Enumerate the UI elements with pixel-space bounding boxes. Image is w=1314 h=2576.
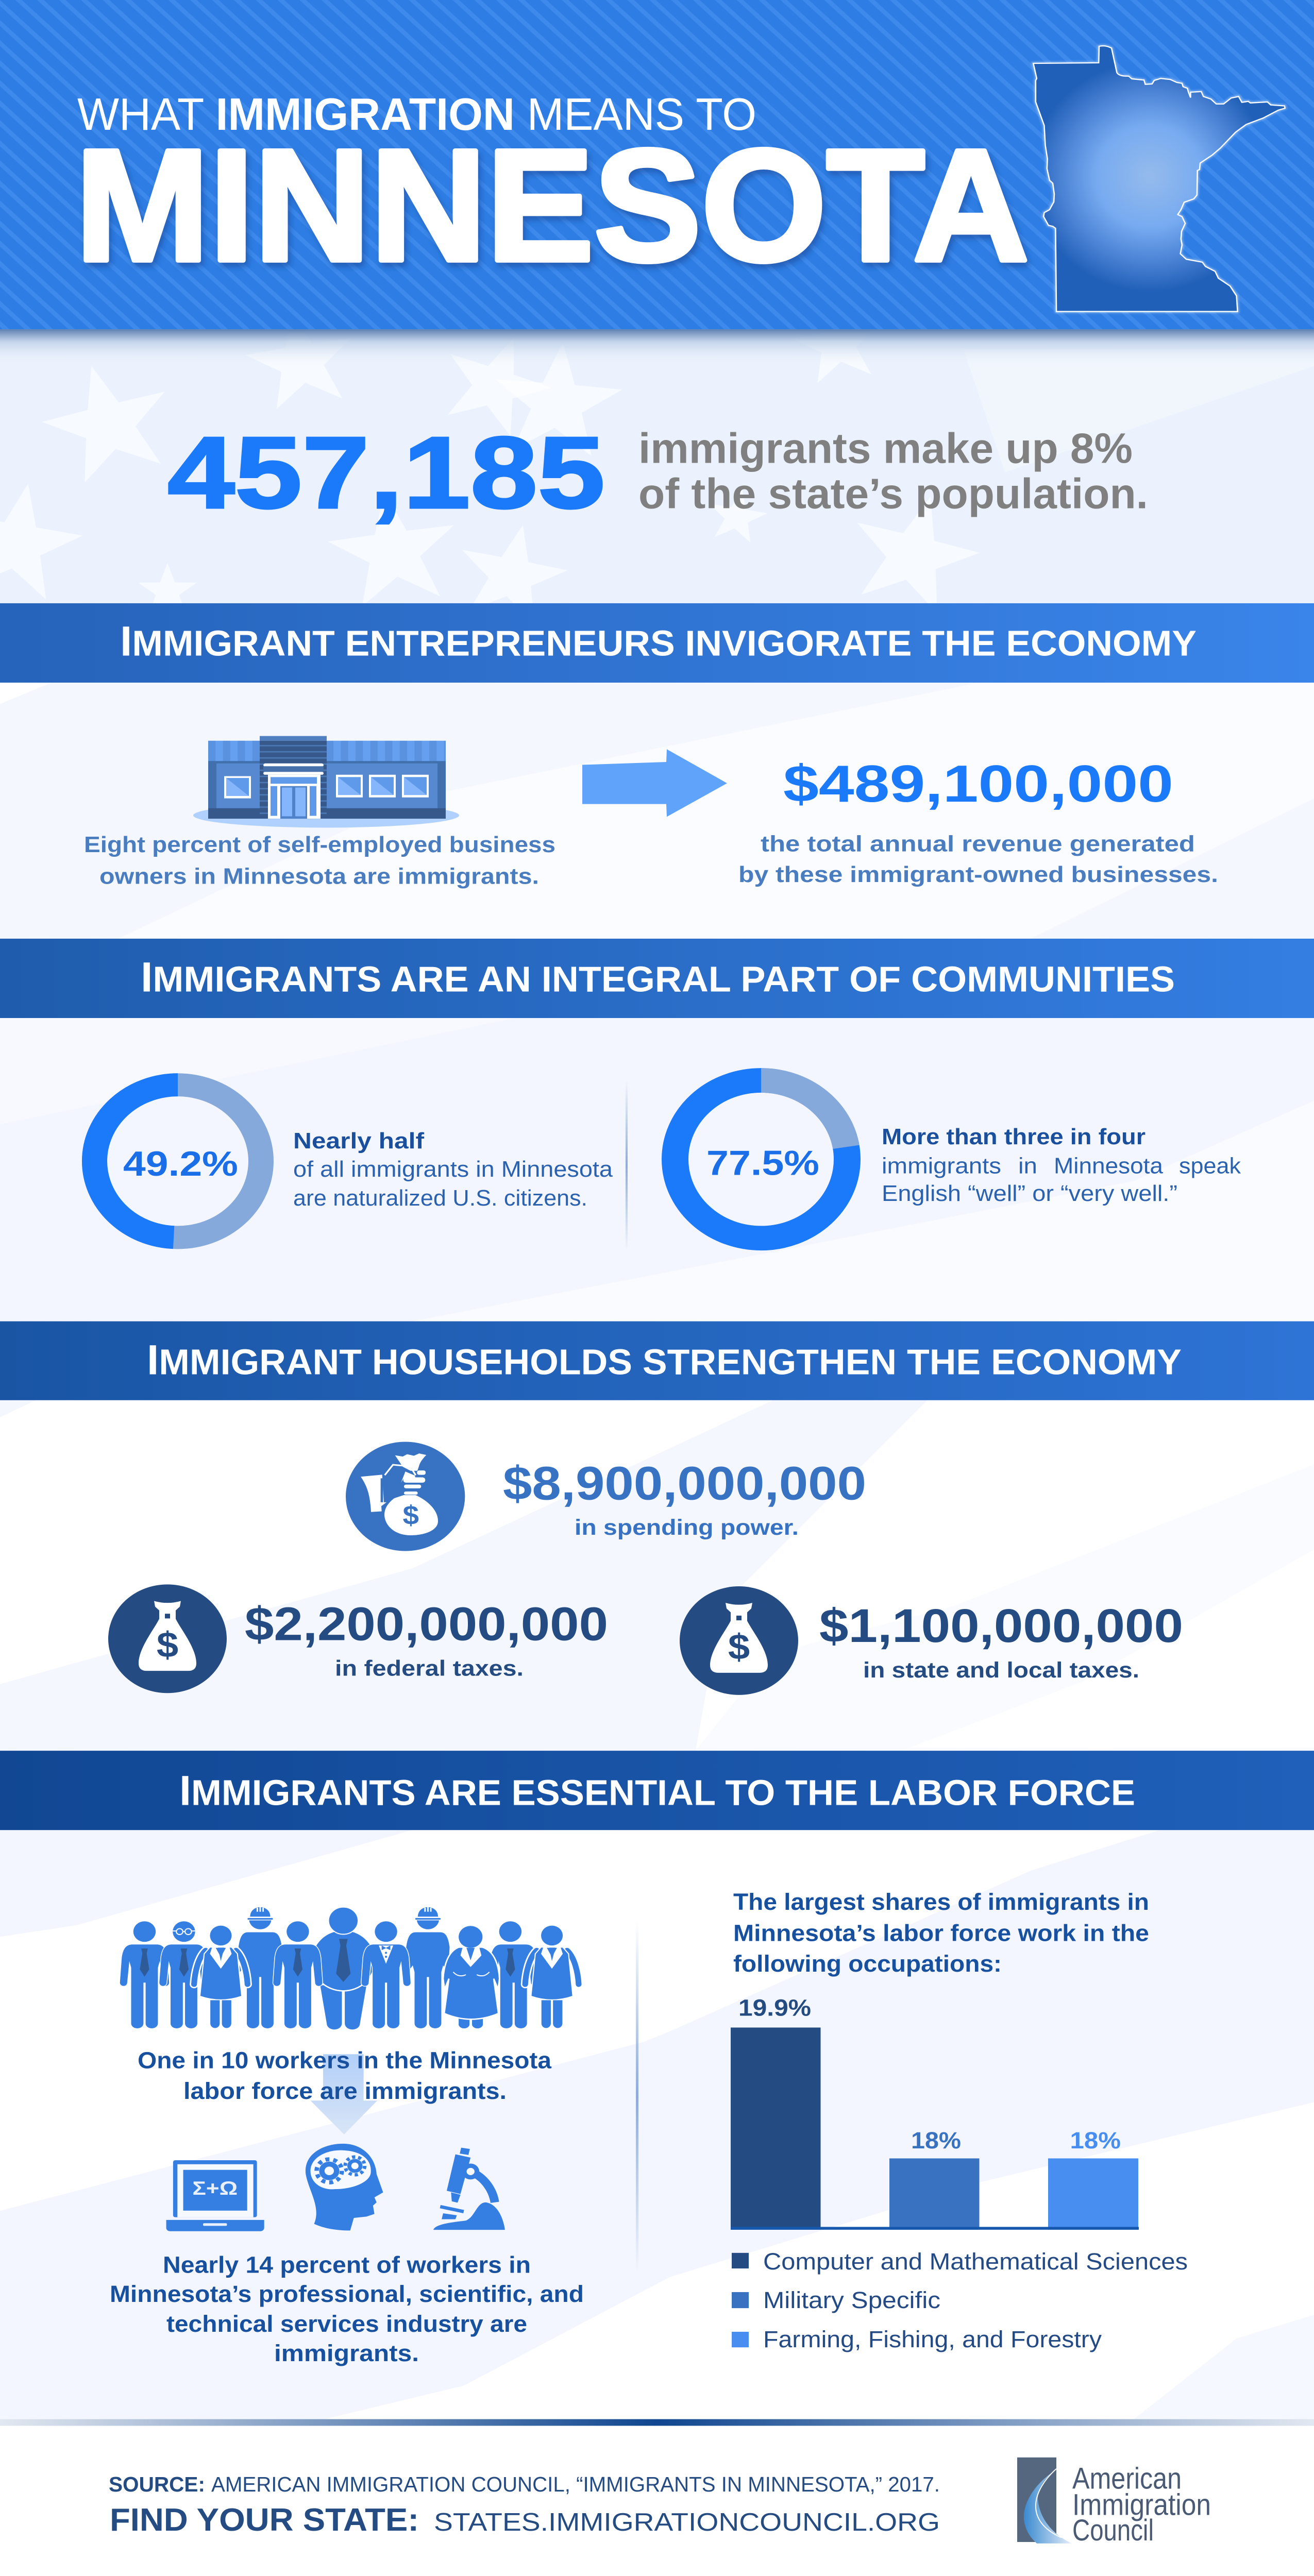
panel: labor force background [0, 1830, 1314, 2419]
text: occupations heading: The largest shares of immigrants in [733, 1889, 1149, 1916]
icon: money bag federal: $ [157, 1625, 178, 1665]
legend: Military Specific [763, 2287, 940, 2314]
footer: find your state: FIND YOUR STATE: [110, 2502, 419, 2537]
logo: American Immigration Council: Immigration [1072, 2488, 1211, 2522]
text: English proficiency: English “well” or “very well.” [882, 1181, 1177, 1206]
panel: communities background [0, 1018, 1314, 1321]
text: naturalized citizens: of all immigrants in Minnesota [293, 1157, 613, 1182]
icon: row of workers [120, 1907, 579, 2029]
arrow: down [310, 2054, 377, 2134]
panel: header [0, 0, 1314, 329]
text: naturalized citizens [293, 1128, 613, 1211]
chart: donut 49.2%: 49.2% [123, 1145, 238, 1184]
text: one in 10 workers: One in 10 workers in the Minnesota [138, 2047, 551, 2074]
logo: American Immigration Council: American [1072, 2462, 1182, 2496]
text: self-employed owners: Eight percent of self-employed business [84, 832, 555, 857]
icon: hand holding money bag [346, 1442, 465, 1551]
value: 19.9%: 19.9% [738, 1995, 811, 2021]
chart: donut 77.5% [675, 1080, 847, 1238]
chart: donut 77.5%: 77.5% [706, 1144, 819, 1183]
federal taxes figure: $2,200,000,000 [245, 1598, 608, 1651]
state and local taxes figure: in state and local taxes. [863, 1658, 1139, 1683]
heading band: entrepreneurs: IMMIGRANT ENTREPRENEURS INVIGORATE THE ECONOMY [120, 618, 1197, 665]
heading band: households [0, 1321, 1314, 1400]
text: occupations heading: Minnesota’s labor force work in the [733, 1921, 1149, 1946]
icon: storefront [193, 736, 459, 827]
heading band: households: IMMIGRANT HOUSEHOLDS STRENGTHEN THE ECONOMY [147, 1337, 1182, 1383]
heading band: entrepreneurs [0, 603, 1314, 683]
legend [732, 2249, 1188, 2353]
chart: donut 49.2% [95, 1085, 261, 1238]
text: occupations heading: following occupations: [733, 1951, 1002, 1977]
footer: find your state: STATES.IMMIGRATIONCOUNCIL.ORG [434, 2507, 940, 2536]
spending power figure: in spending power. [575, 1516, 799, 1540]
bar chart: occupations [731, 1995, 1139, 2230]
footer: source line: SOURCE: [109, 2473, 205, 2496]
icon: laptop: Σ+Ω [192, 2178, 238, 2199]
heading band: labor force: IMMIGRANTS ARE ESSENTIAL TO THE LABOR FORCE [179, 1768, 1135, 1815]
big number: 457,185 [167, 415, 605, 530]
panel: population statistic [0, 296, 1314, 628]
text: nearly 14 percent: Minnesota’s professional, scientific, and [110, 2281, 584, 2308]
text: one in 10 workers [138, 2047, 551, 2104]
text: English proficiency: More than three in four [882, 1124, 1145, 1149]
federal taxes figure: in federal taxes. [335, 1656, 524, 1681]
legend: Computer and Mathematical Sciences [763, 2249, 1188, 2275]
text: nearly 14 percent: immigrants. [274, 2341, 419, 2366]
text: naturalized citizens: are naturalized U.S. citizens. [293, 1185, 587, 1211]
text: revenue: the total annual revenue generated [761, 831, 1195, 856]
text: self-employed owners [84, 832, 555, 889]
icon: Minnesota state map [1033, 46, 1285, 312]
icon: microscope [433, 2148, 505, 2230]
statistic text [638, 425, 1148, 518]
heading band: labor force [0, 1751, 1314, 1830]
logo: American Immigration Council [1017, 2458, 1211, 2548]
text: English proficiency: in [1018, 1153, 1037, 1178]
state and local taxes figure: $1,100,000,000 [819, 1600, 1183, 1652]
panel: households background [0, 1400, 1314, 1751]
icon: head with gears [306, 2144, 383, 2230]
spending power figure [503, 1457, 866, 1540]
bar: military specific [889, 2158, 979, 2230]
statistic text: immigrants make up 8% [638, 425, 1133, 472]
text: naturalized citizens: Nearly half [293, 1128, 425, 1154]
bar: computer and mathematical sciences [731, 2027, 820, 2230]
icon: money bag federal [108, 1584, 227, 1693]
spending power figure: $8,900,000,000 [503, 1457, 866, 1510]
text: self-employed owners: owners in Minnesota are immigrants. [99, 863, 539, 889]
heading band: communities [0, 939, 1314, 1018]
text: nearly 14 percent: Nearly 14 percent of workers in [163, 2252, 531, 2278]
value: 18% farming: 18% [1070, 2128, 1121, 2154]
logo: American Immigration Council: Council [1072, 2514, 1154, 2548]
text: one in 10 workers: labor force are immigrants. [183, 2078, 507, 2104]
arrow: right [582, 749, 727, 817]
bar: farming, fishing, forestry [1048, 2158, 1138, 2230]
title: Minnesota: MINNESOTA [75, 116, 1029, 294]
panel: entrepreneurs background [0, 683, 1314, 939]
federal taxes figure [245, 1598, 608, 1681]
icon: laptop [166, 2160, 264, 2231]
value: 18% military: 18% [911, 2128, 961, 2154]
text: English proficiency: Minnesota [1054, 1153, 1164, 1178]
text: revenue [738, 831, 1218, 887]
text: nearly 14 percent [110, 2252, 584, 2366]
text: revenue: by these immigrant-owned businesses. [738, 861, 1218, 887]
icon: money bag state [680, 1586, 798, 1695]
heading band: communities: IMMIGRANTS ARE AN INTEGRAL PART OF COMMUNITIES [141, 954, 1175, 1001]
text: occupations heading [733, 1889, 1149, 1977]
legend: Farming, Fishing, and Forestry [763, 2327, 1102, 2353]
footer: find your state [110, 2502, 940, 2537]
footer: source line: AMERICAN IMMIGRATION COUNCIL, “IMMIGRANTS IN MINNESOTA,” 2017. [211, 2473, 940, 2496]
text: English proficiency: speak [1179, 1153, 1241, 1178]
text: nearly 14 percent: technical services industry are [166, 2311, 527, 2337]
state and local taxes figure [819, 1600, 1183, 1683]
revenue figure: $489,100,000 [783, 755, 1173, 813]
text: English proficiency: immigrants [882, 1153, 1001, 1178]
title line: what immigration means to: WHAT IMMIGRATION MEANS TO [77, 89, 756, 140]
icon: hand holding money bag: $ [403, 1500, 419, 1530]
icon: money bag state: $ [728, 1627, 750, 1667]
text: English proficiency [882, 1124, 1241, 1206]
statistic text: of the state’s population. [638, 470, 1148, 518]
